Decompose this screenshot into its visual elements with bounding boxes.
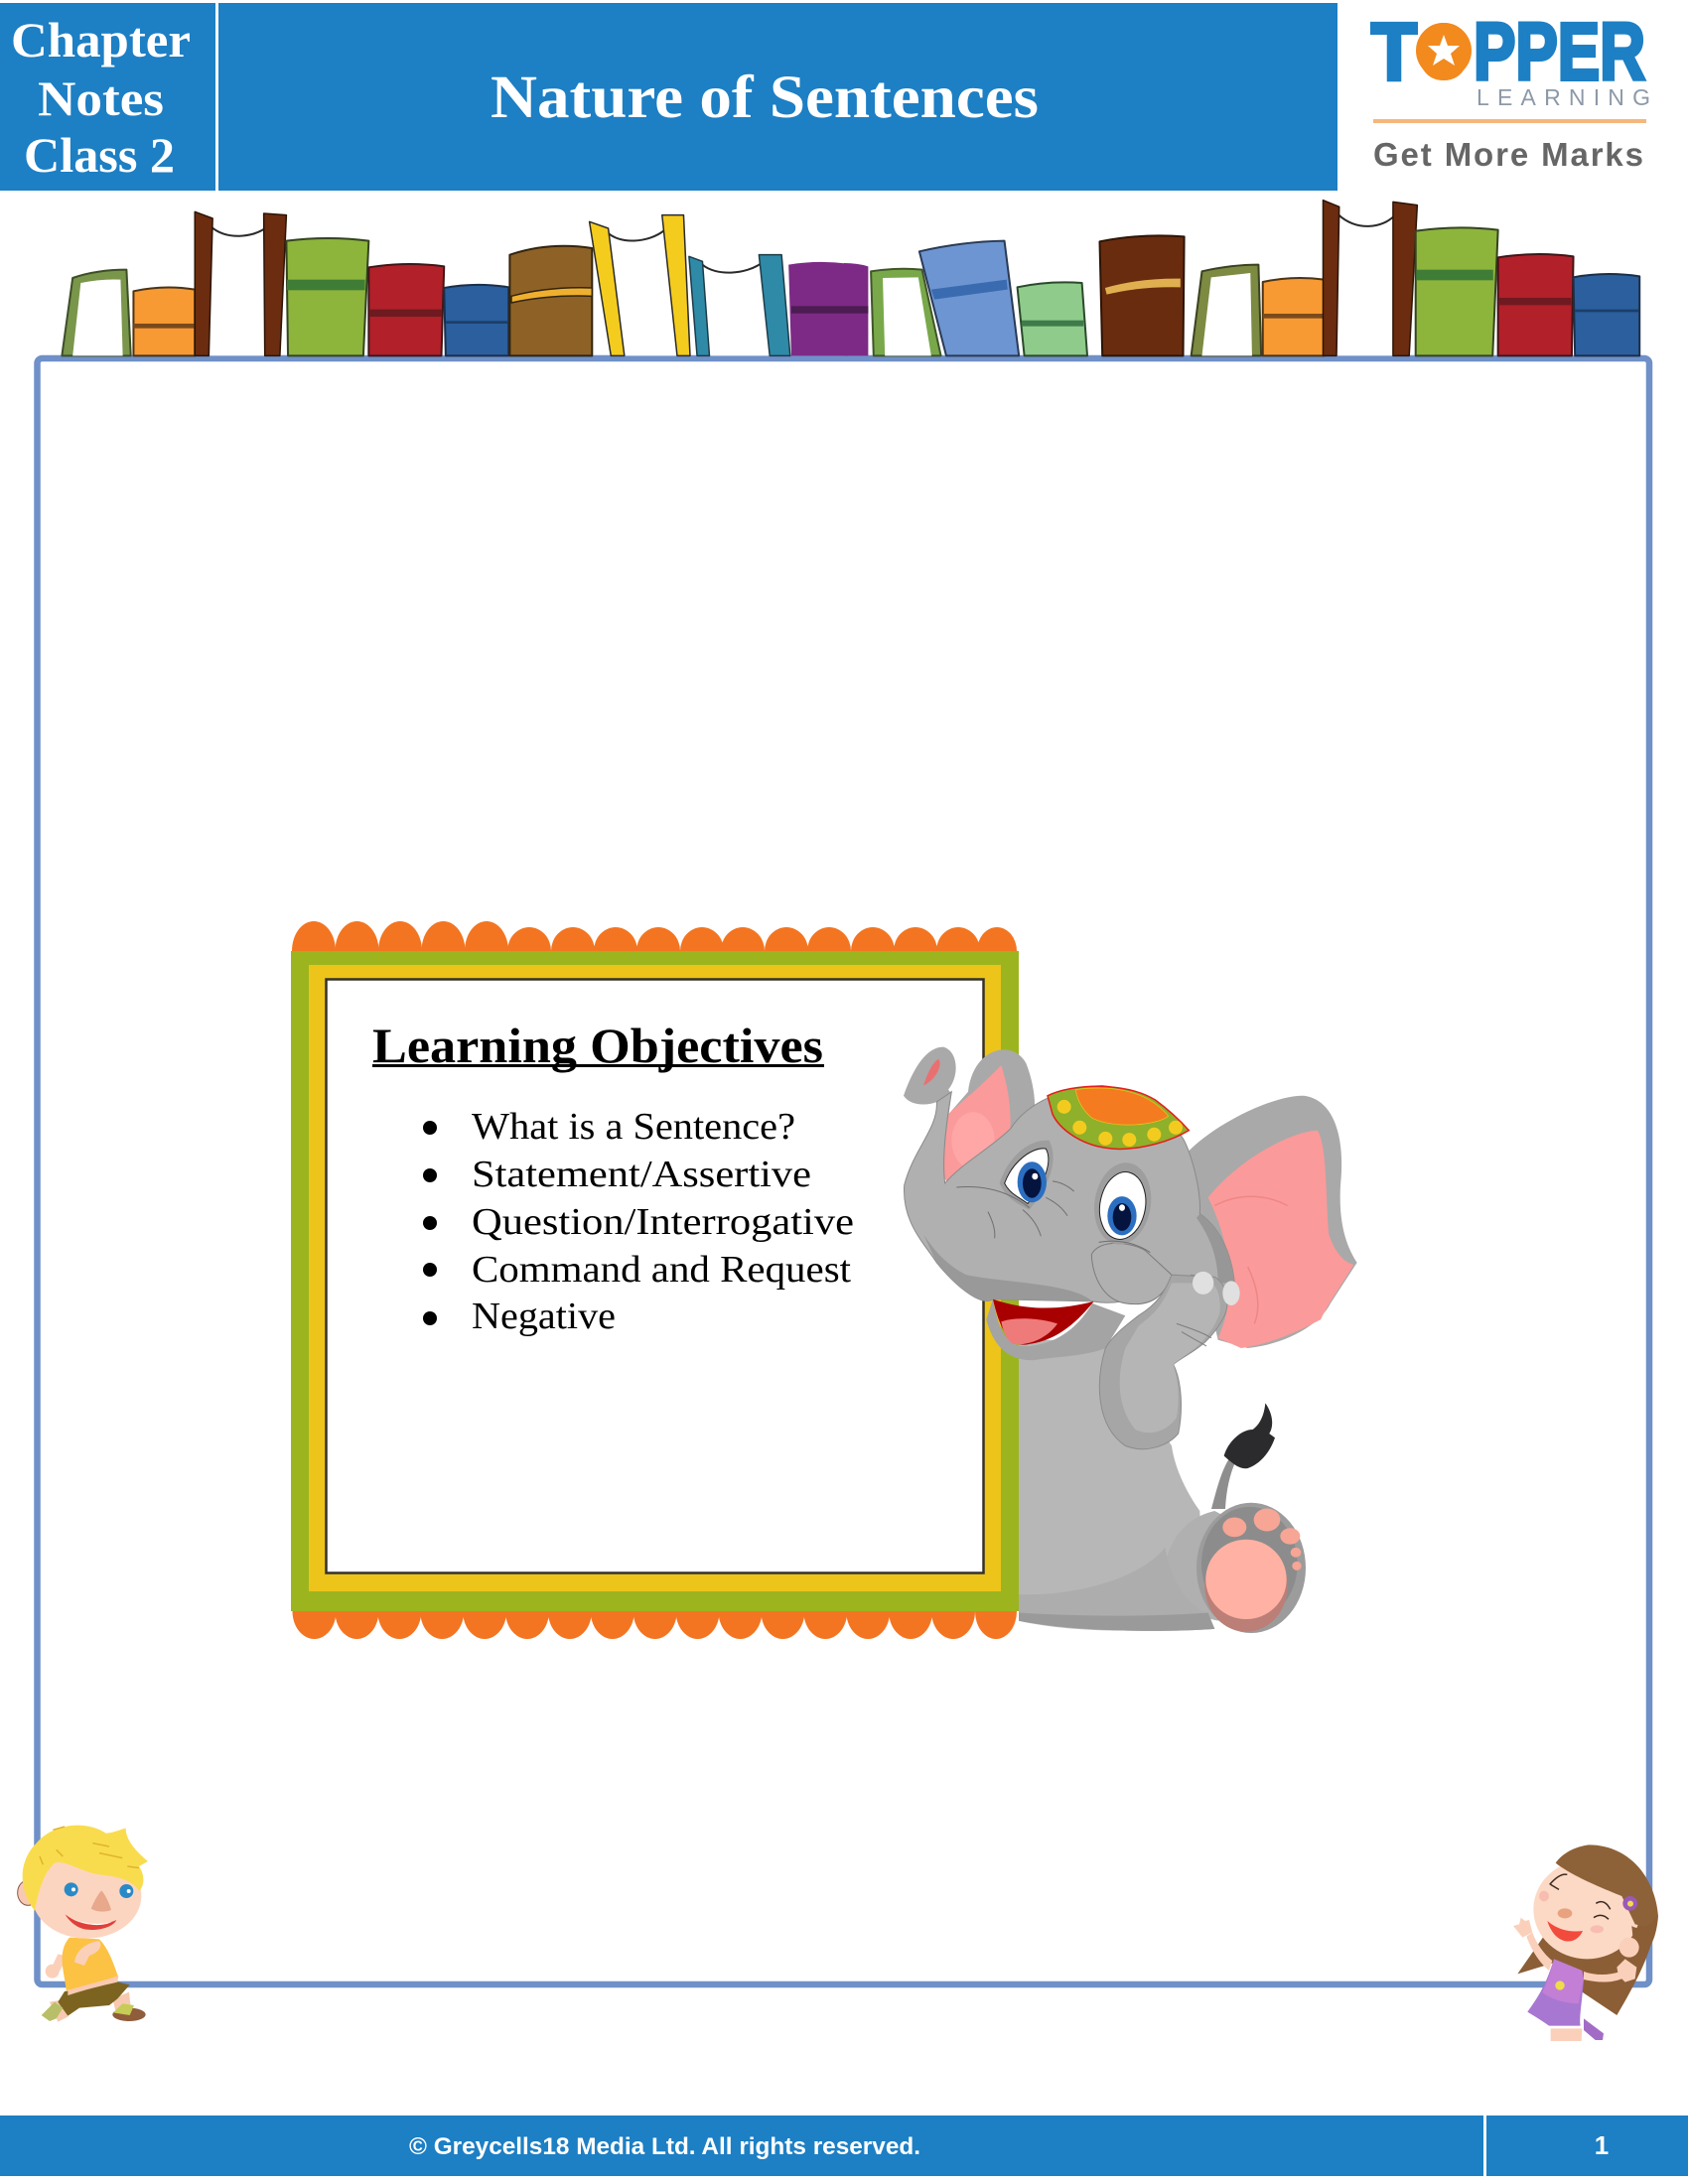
panel: footer page number: 1 bbox=[1595, 2130, 1609, 2160]
icon: elephant mascot bbox=[904, 1047, 1357, 1633]
list: objectives bbox=[423, 1106, 854, 1337]
panel: chapter label: Class 2 bbox=[24, 127, 175, 183]
icon: Topper Learning logo: T bbox=[1371, 7, 1417, 97]
list: objectives: What is a Sentence? bbox=[472, 1106, 795, 1148]
icon: girl character bbox=[1513, 1844, 1658, 2041]
icon: Topper Learning logo: LEARNING bbox=[1477, 84, 1650, 110]
list: objectives: Question/Interrogative bbox=[472, 1201, 854, 1243]
panel: footer copyright bar: © Greycells18 Media Ltd. All rights reserved. bbox=[409, 2133, 920, 2160]
panel: page frame bbox=[38, 358, 1649, 1984]
panel: chapter label: Notes bbox=[38, 70, 164, 126]
panel: chapter label bbox=[0, 3, 215, 191]
heading: learning objectives: Learning Objectives bbox=[372, 1018, 823, 1073]
panel: chapter label: Chapter bbox=[11, 12, 191, 68]
icon: row of books (left) bbox=[62, 211, 848, 355]
panel: footer copyright bar bbox=[0, 2116, 1483, 2176]
panel: footer page number bbox=[1486, 2116, 1688, 2176]
icon: Topper Learning logo bbox=[1371, 7, 1650, 173]
icon: row of books (right) bbox=[844, 201, 1639, 355]
list: objectives: Command and Request bbox=[472, 1249, 851, 1291]
list: objectives: Negative bbox=[472, 1296, 616, 1337]
panel: title banner bbox=[218, 3, 1337, 191]
icon: boy character bbox=[18, 1826, 148, 2022]
panel: learning objectives board bbox=[291, 921, 1019, 1639]
icon: Topper Learning logo: O bbox=[1416, 7, 1472, 97]
list: objectives: Statement/Assertive bbox=[472, 1154, 811, 1195]
panel: title banner: Nature of Sentences bbox=[491, 65, 1039, 131]
icon: Topper Learning logo: Get More Marks bbox=[1373, 136, 1643, 173]
